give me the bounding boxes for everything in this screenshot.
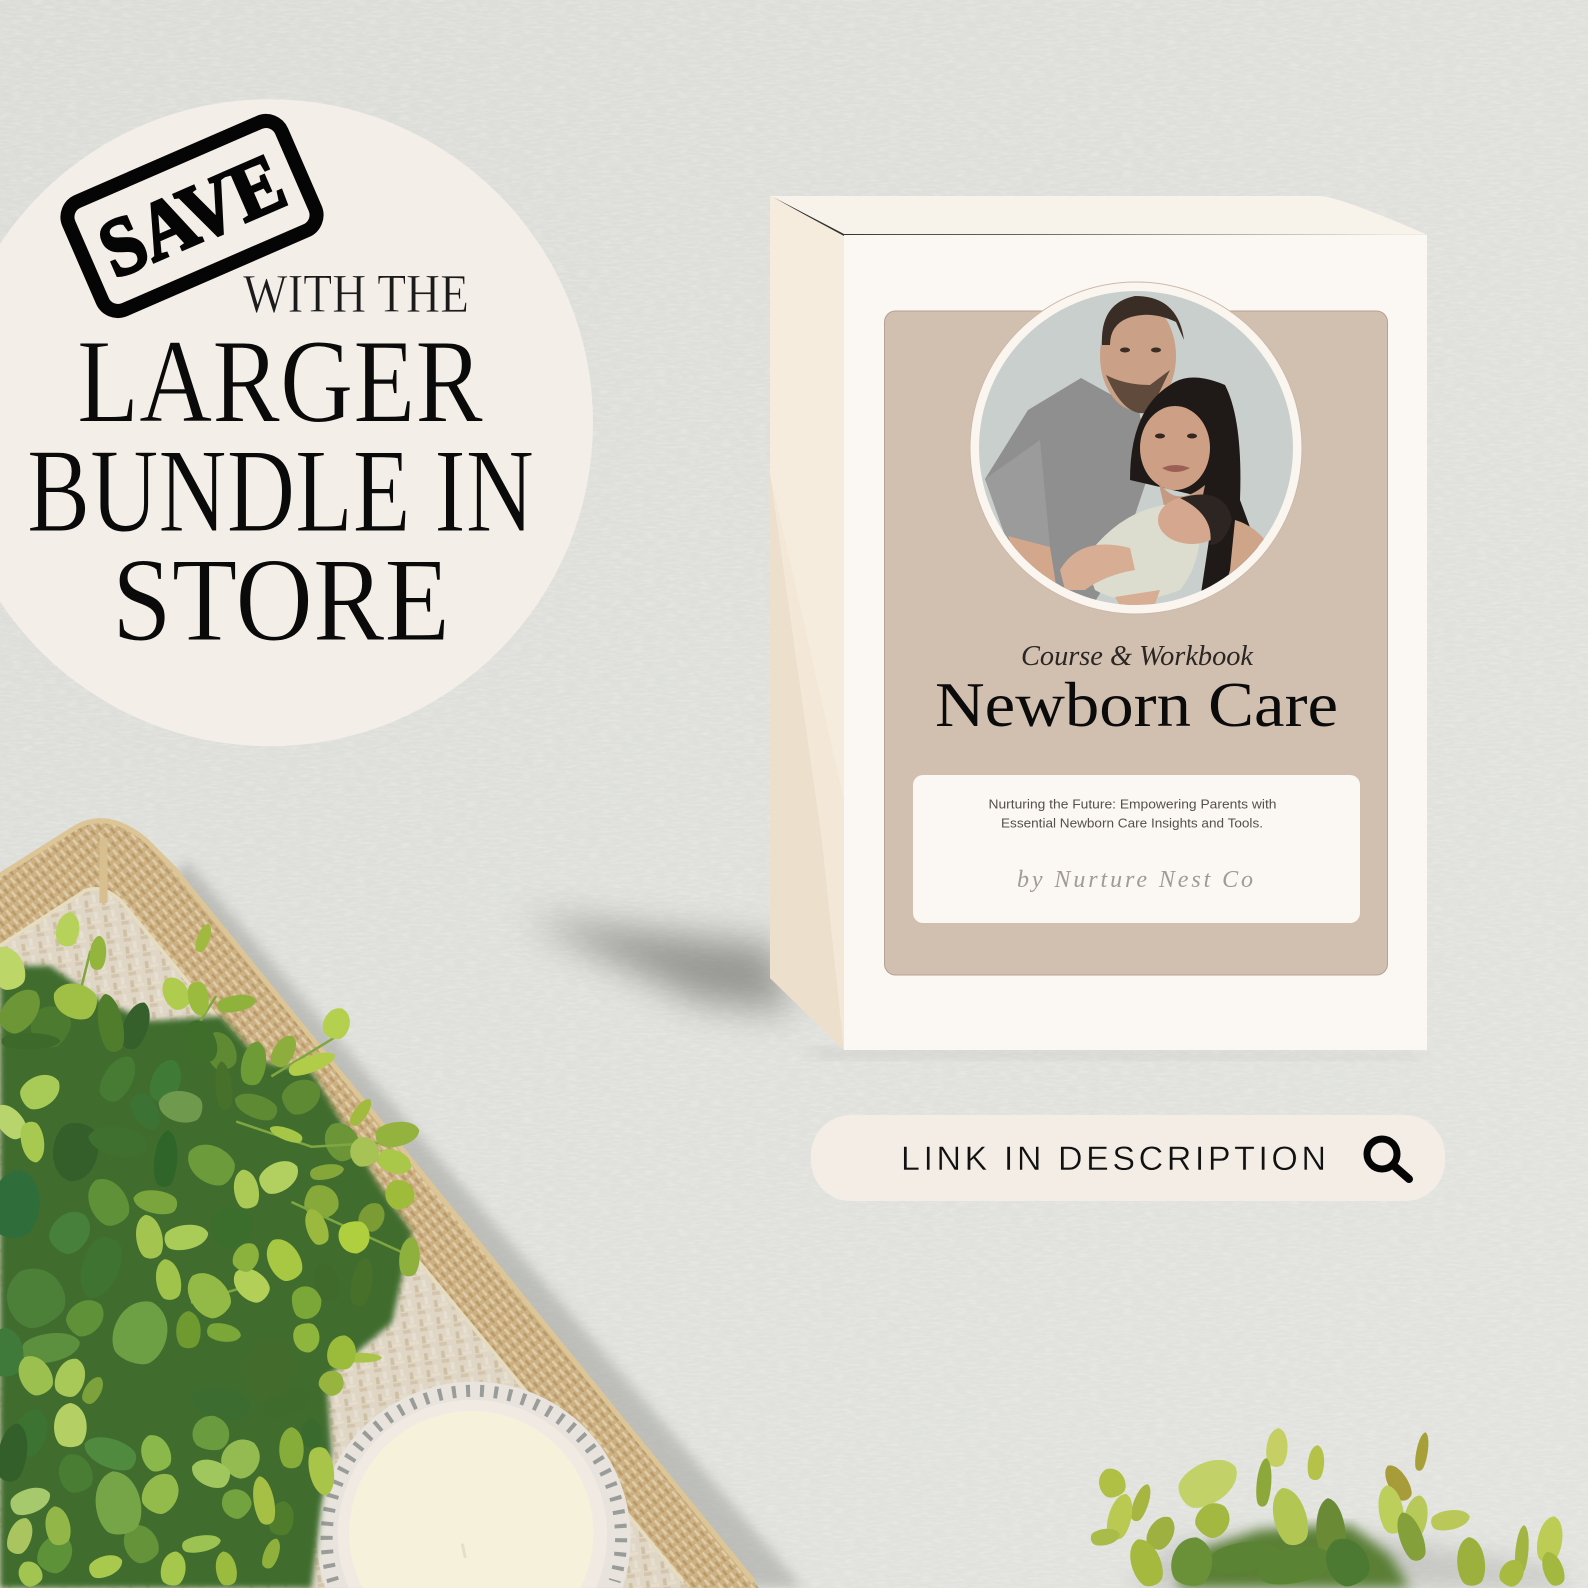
heading line: store: STORE: [112, 533, 450, 666]
candle: [317, 1382, 631, 1588]
photo: family with newborn: [970, 280, 1302, 620]
tagline: Nurturing the Future: Empowering Parents with: [988, 798, 1277, 812]
woven tray base: [0, 889, 688, 1588]
heading line: with the: WITH THE: [243, 263, 469, 324]
heading line: bundle in: BUNDLE IN: [27, 424, 534, 557]
product title: Newborn Care: [935, 669, 1338, 740]
callout circle: save with the larger bundle: [0, 99, 593, 746]
heading line: larger: LARGER: [77, 314, 483, 448]
signature: by Nurture Nest Co: [1017, 867, 1253, 893]
tray stitch: [99, 838, 108, 903]
box top shadow line: [773, 197, 1427, 237]
eucalyptus plant: [0, 910, 421, 1588]
box front: [844, 235, 1427, 1050]
icon: magnifying glass: [1367, 1139, 1409, 1179]
woven tray rim: [0, 821, 759, 1588]
tagline: Essential Newborn Care Insights and Tools.: [1001, 816, 1263, 830]
link text: LINK IN DESCRIPTION: [901, 1140, 1326, 1178]
product box: [770, 196, 1427, 1050]
tan panel: [884, 311, 1388, 975]
box side: [770, 196, 844, 1050]
box cast shadow: [525, 918, 1420, 1060]
tray with plant and candle: [0, 821, 803, 1588]
course title: Course & Workbook: [1021, 640, 1254, 672]
bottom right plant: [1090, 1427, 1570, 1588]
stamp: SAVE: SAVE: [86, 136, 298, 296]
tray shadow: [166, 860, 803, 1588]
box top flap: [770, 196, 1427, 234]
description card: [913, 775, 1360, 923]
link pill: [811, 1115, 1445, 1201]
